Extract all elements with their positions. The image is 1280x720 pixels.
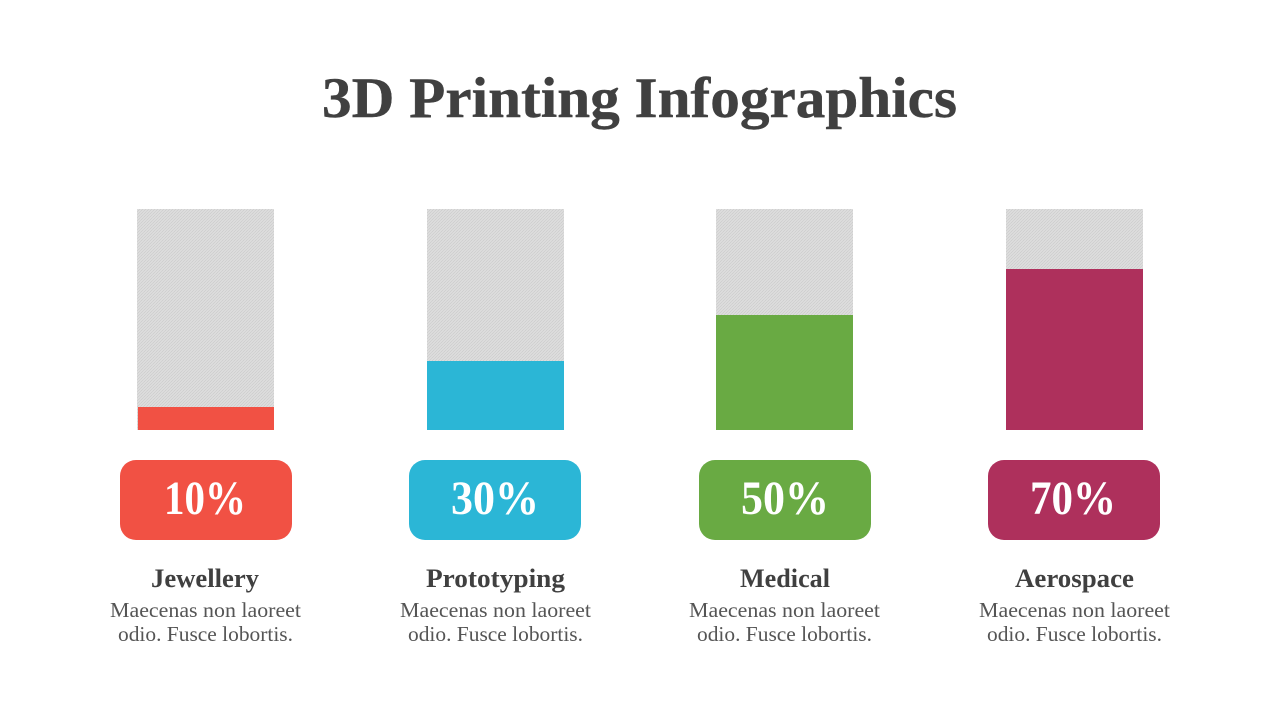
description: aerospace: [979, 598, 1170, 646]
description: aerospace: Maecenas non laoreet: [979, 598, 1170, 622]
description: prototyping: Maecenas non laoreet: [400, 598, 591, 622]
bar fill: aerospace 70%: [1006, 269, 1143, 430]
bar fill: medical 50%: [716, 315, 853, 430]
bar track: jewellery: [137, 209, 274, 430]
bar fill: jewellery 10%: [138, 407, 274, 430]
badge: 50%: [699, 460, 871, 540]
bar track: medical: [716, 209, 853, 430]
badge: 10%: [120, 460, 292, 540]
title: 3D Printing Infographics: [322, 67, 957, 130]
panel: jewellery: [110, 209, 301, 646]
description: jewellery: Maecenas non laoreet: [110, 598, 301, 622]
description: jewellery: odio. Fusce lobortis.: [118, 622, 293, 646]
description: aerospace: odio. Fusce lobortis.: [987, 622, 1162, 646]
bar fill: prototyping 30%: [427, 361, 564, 430]
heading: Medical: Medical: [740, 564, 830, 593]
description: medical: [689, 598, 880, 646]
badge: 30%: [409, 460, 581, 540]
description: medical: odio. Fusce lobortis.: [697, 622, 872, 646]
badge: 70%: 70%: [1030, 472, 1116, 525]
panel: aerospace: [979, 209, 1170, 646]
badge: 70%: [988, 460, 1160, 540]
badge: 50%: 50%: [741, 472, 829, 525]
description: jewellery: [110, 598, 301, 646]
description: prototyping: odio. Fusce lobortis.: [408, 622, 583, 646]
heading: Jewellery: Jewellery: [151, 564, 259, 593]
description: medical: Maecenas non laoreet: [689, 598, 880, 622]
heading: Prototyping: Prototyping: [426, 564, 565, 593]
badge: 10%: 10%: [164, 472, 246, 525]
badge: 30%: 30%: [451, 472, 539, 525]
bar track: prototyping: [427, 209, 564, 430]
heading: Aerospace: Aerospace: [1015, 564, 1134, 593]
panel: medical: [689, 209, 880, 646]
bar track: aerospace: [1006, 209, 1143, 430]
panel: prototyping: [400, 209, 591, 646]
description: prototyping: [400, 598, 591, 646]
